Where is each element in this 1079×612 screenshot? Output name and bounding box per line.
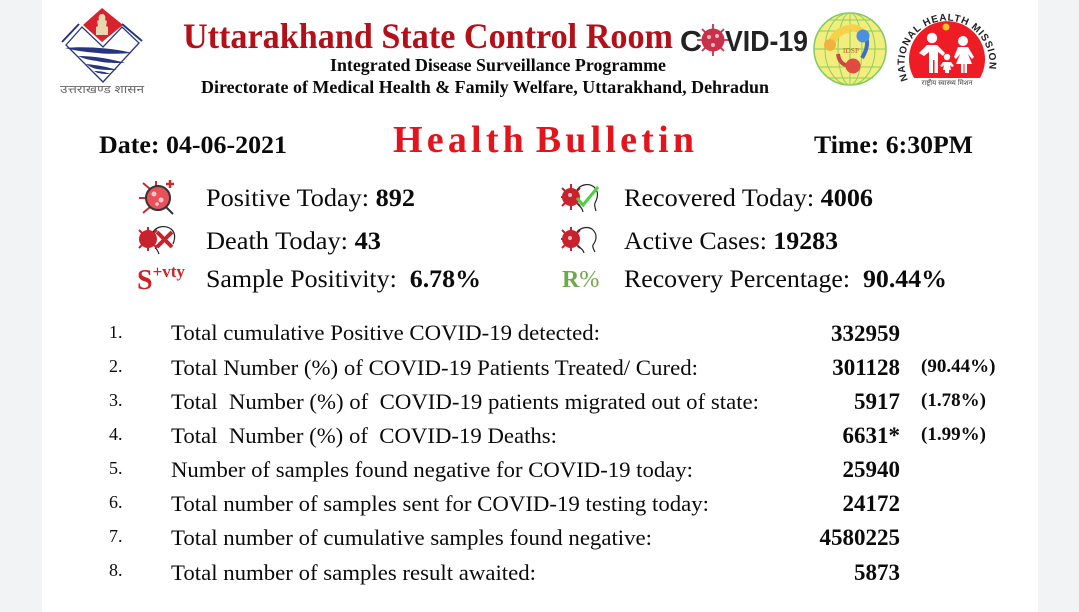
- table row 3: 3.: [109, 390, 122, 410]
- table row 7: Total number of cumulative samples found negative:: [171, 525, 652, 550]
- table row 4: Total Number (%) of COVID-19 Deaths:: [171, 423, 557, 448]
- table row 5: [109, 457, 900, 482]
- table row 6: 6.: [109, 492, 122, 512]
- table row 1: Total cumulative Positive COVID-19 detected:: [171, 320, 600, 345]
- table row 3: (1.78%): [921, 390, 986, 411]
- table row 3: [109, 389, 986, 414]
- table row 4: 6631*: [842, 423, 900, 448]
- table row 7: 7.: [109, 526, 122, 546]
- stat: recovered today: Recovered Today: 4006: [624, 183, 873, 212]
- COVID-19 logo: C: [680, 26, 702, 58]
- table row 5: 25940: [842, 457, 900, 482]
- table row 8: [109, 560, 900, 585]
- title: Uttarakhand State Control Room: [183, 16, 673, 56]
- stat: positive today: Positive Today: 892: [206, 183, 415, 212]
- icon: recovery percentage symbol: R%: [562, 267, 599, 293]
- date: Date: 04-06-2021: [99, 130, 287, 159]
- COVID-19 logo: [680, 24, 808, 58]
- table row 8: 8.: [109, 560, 122, 580]
- table row 6: [109, 491, 900, 516]
- table row 4: 4.: [109, 424, 122, 444]
- table row 8: Total number of samples result awaited:: [171, 560, 536, 585]
- icon: National Health Mission logo: राष्ट्रीय स्वास्थ्य मिशन: [922, 78, 973, 87]
- heading: Health Bulletin: Health Bulletin: [393, 119, 694, 161]
- table row 7: [109, 525, 900, 550]
- icon: sample positivity symbol: +vty: [153, 262, 185, 281]
- table row 1: [109, 320, 900, 346]
- table row 8: 5873: [854, 560, 900, 585]
- icon: IDSP globe: [814, 13, 886, 85]
- table row 4: (1.99%): [921, 424, 986, 445]
- table row 2: 2.: [109, 356, 122, 376]
- stat: death today: Death Today: 43: [206, 226, 381, 255]
- COVID-19 logo: VID-19: [725, 26, 808, 58]
- table row 6: Total number of samples sent for COVID-19 testing today:: [171, 491, 709, 516]
- table row 6: 24172: [842, 491, 900, 516]
- table row 3: 5917: [854, 389, 900, 414]
- subtitle: directorate: Directorate of Medical Health & Family Welfare, Uttarakhand, Dehradun: [201, 77, 769, 97]
- table row 3: Total Number (%) of COVID-19 patients migrated out of state:: [171, 389, 759, 414]
- table row 5: Number of samples found negative for COVID-19 today:: [171, 457, 693, 482]
- subtitle: programme: Integrated Disease Surveillance Programme: [330, 55, 666, 75]
- icon: National Health Mission logo: NATIONAL HEALTH MISSION: [898, 14, 996, 82]
- table row 5: 5.: [109, 458, 122, 478]
- icon: Uttarakhand emblem: [60, 8, 145, 96]
- table row 4: [109, 423, 986, 448]
- table row 2: (90.44%): [921, 356, 995, 377]
- table row 2: [109, 355, 995, 380]
- icon: sample positivity symbol: S: [137, 265, 153, 296]
- icon: recovered today head with check: [561, 184, 598, 212]
- time: Time: 6:30PM: [814, 130, 973, 159]
- table row 1: 332959: [831, 321, 900, 346]
- table row 2: Total Number (%) of COVID-19 Patients Treated/ Cured:: [171, 355, 698, 380]
- stat: recovery percentage: Recovery Percentage: 90.44%: [624, 264, 947, 293]
- icon: death today head with cross: [139, 227, 175, 254]
- icon: positive today virus with magnifier: [139, 180, 174, 214]
- table row 1: 1.: [109, 322, 122, 342]
- icon: active cases head: [561, 227, 596, 253]
- stat: sample positivity: Sample Positivity: 6.78%: [206, 264, 481, 293]
- icon: Uttarakhand emblem: उत्तराखण्ड शासन: [60, 84, 145, 96]
- icon: IDSP globe: IDSP: [843, 46, 859, 55]
- stat: active cases: Active Cases: 19283: [624, 226, 838, 255]
- table row 7: 4580225: [820, 525, 900, 550]
- table row 2: 301128: [832, 355, 900, 380]
